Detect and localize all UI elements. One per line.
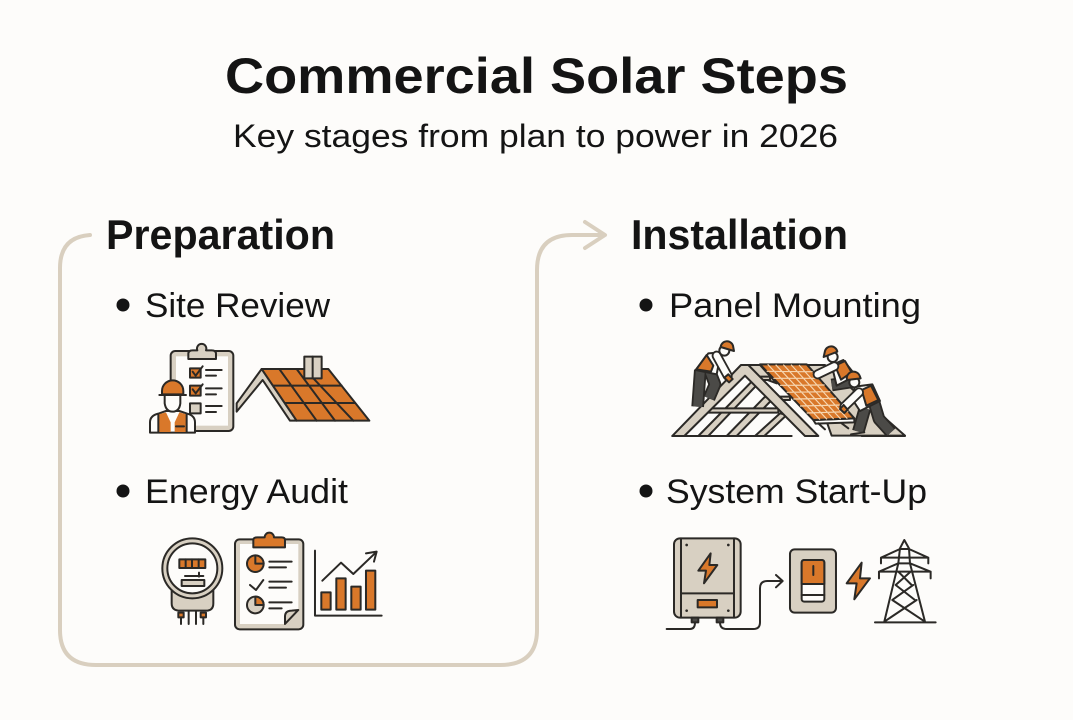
heading: Preparation: Preparation <box>106 211 335 258</box>
subtitle: Key stages from plan to power in 2026 <box>233 118 838 154</box>
lightning bolt <box>847 563 870 599</box>
icon: energy meter, report and growth chart <box>162 533 382 629</box>
switch <box>790 549 836 613</box>
electric meter <box>162 538 222 624</box>
item: Site Review: Site Review <box>145 287 330 325</box>
clipboard checklist <box>171 344 233 431</box>
worker on left <box>696 341 734 407</box>
title: Commercial Solar Steps <box>225 48 848 104</box>
roof with solar panels <box>237 357 369 421</box>
arrow: flow line from Preparation to Installation <box>60 222 605 665</box>
worker with hard hat and vest <box>150 380 195 433</box>
cables and connecting arrow <box>667 575 783 629</box>
inverter <box>674 538 741 622</box>
solar panel <box>760 364 854 429</box>
worker on upper right <box>818 346 856 386</box>
worker on lower right <box>840 372 891 434</box>
transmission tower <box>875 540 936 622</box>
item: Energy Audit: Energy Audit <box>145 473 349 511</box>
icon: workers mounting solar panel on roof truss <box>672 341 905 436</box>
item: Panel Mounting: Panel Mounting <box>669 287 921 325</box>
heading: Installation: Installation <box>631 211 848 258</box>
roof truss <box>672 365 905 436</box>
icon: inverter, switch and transmission tower <box>667 538 936 629</box>
item: System Start-Up: System Start-Up <box>666 473 927 511</box>
icon: site review clipboard, worker and roof <box>150 344 369 433</box>
report clipboard <box>235 533 303 629</box>
growth bar chart <box>315 551 382 616</box>
